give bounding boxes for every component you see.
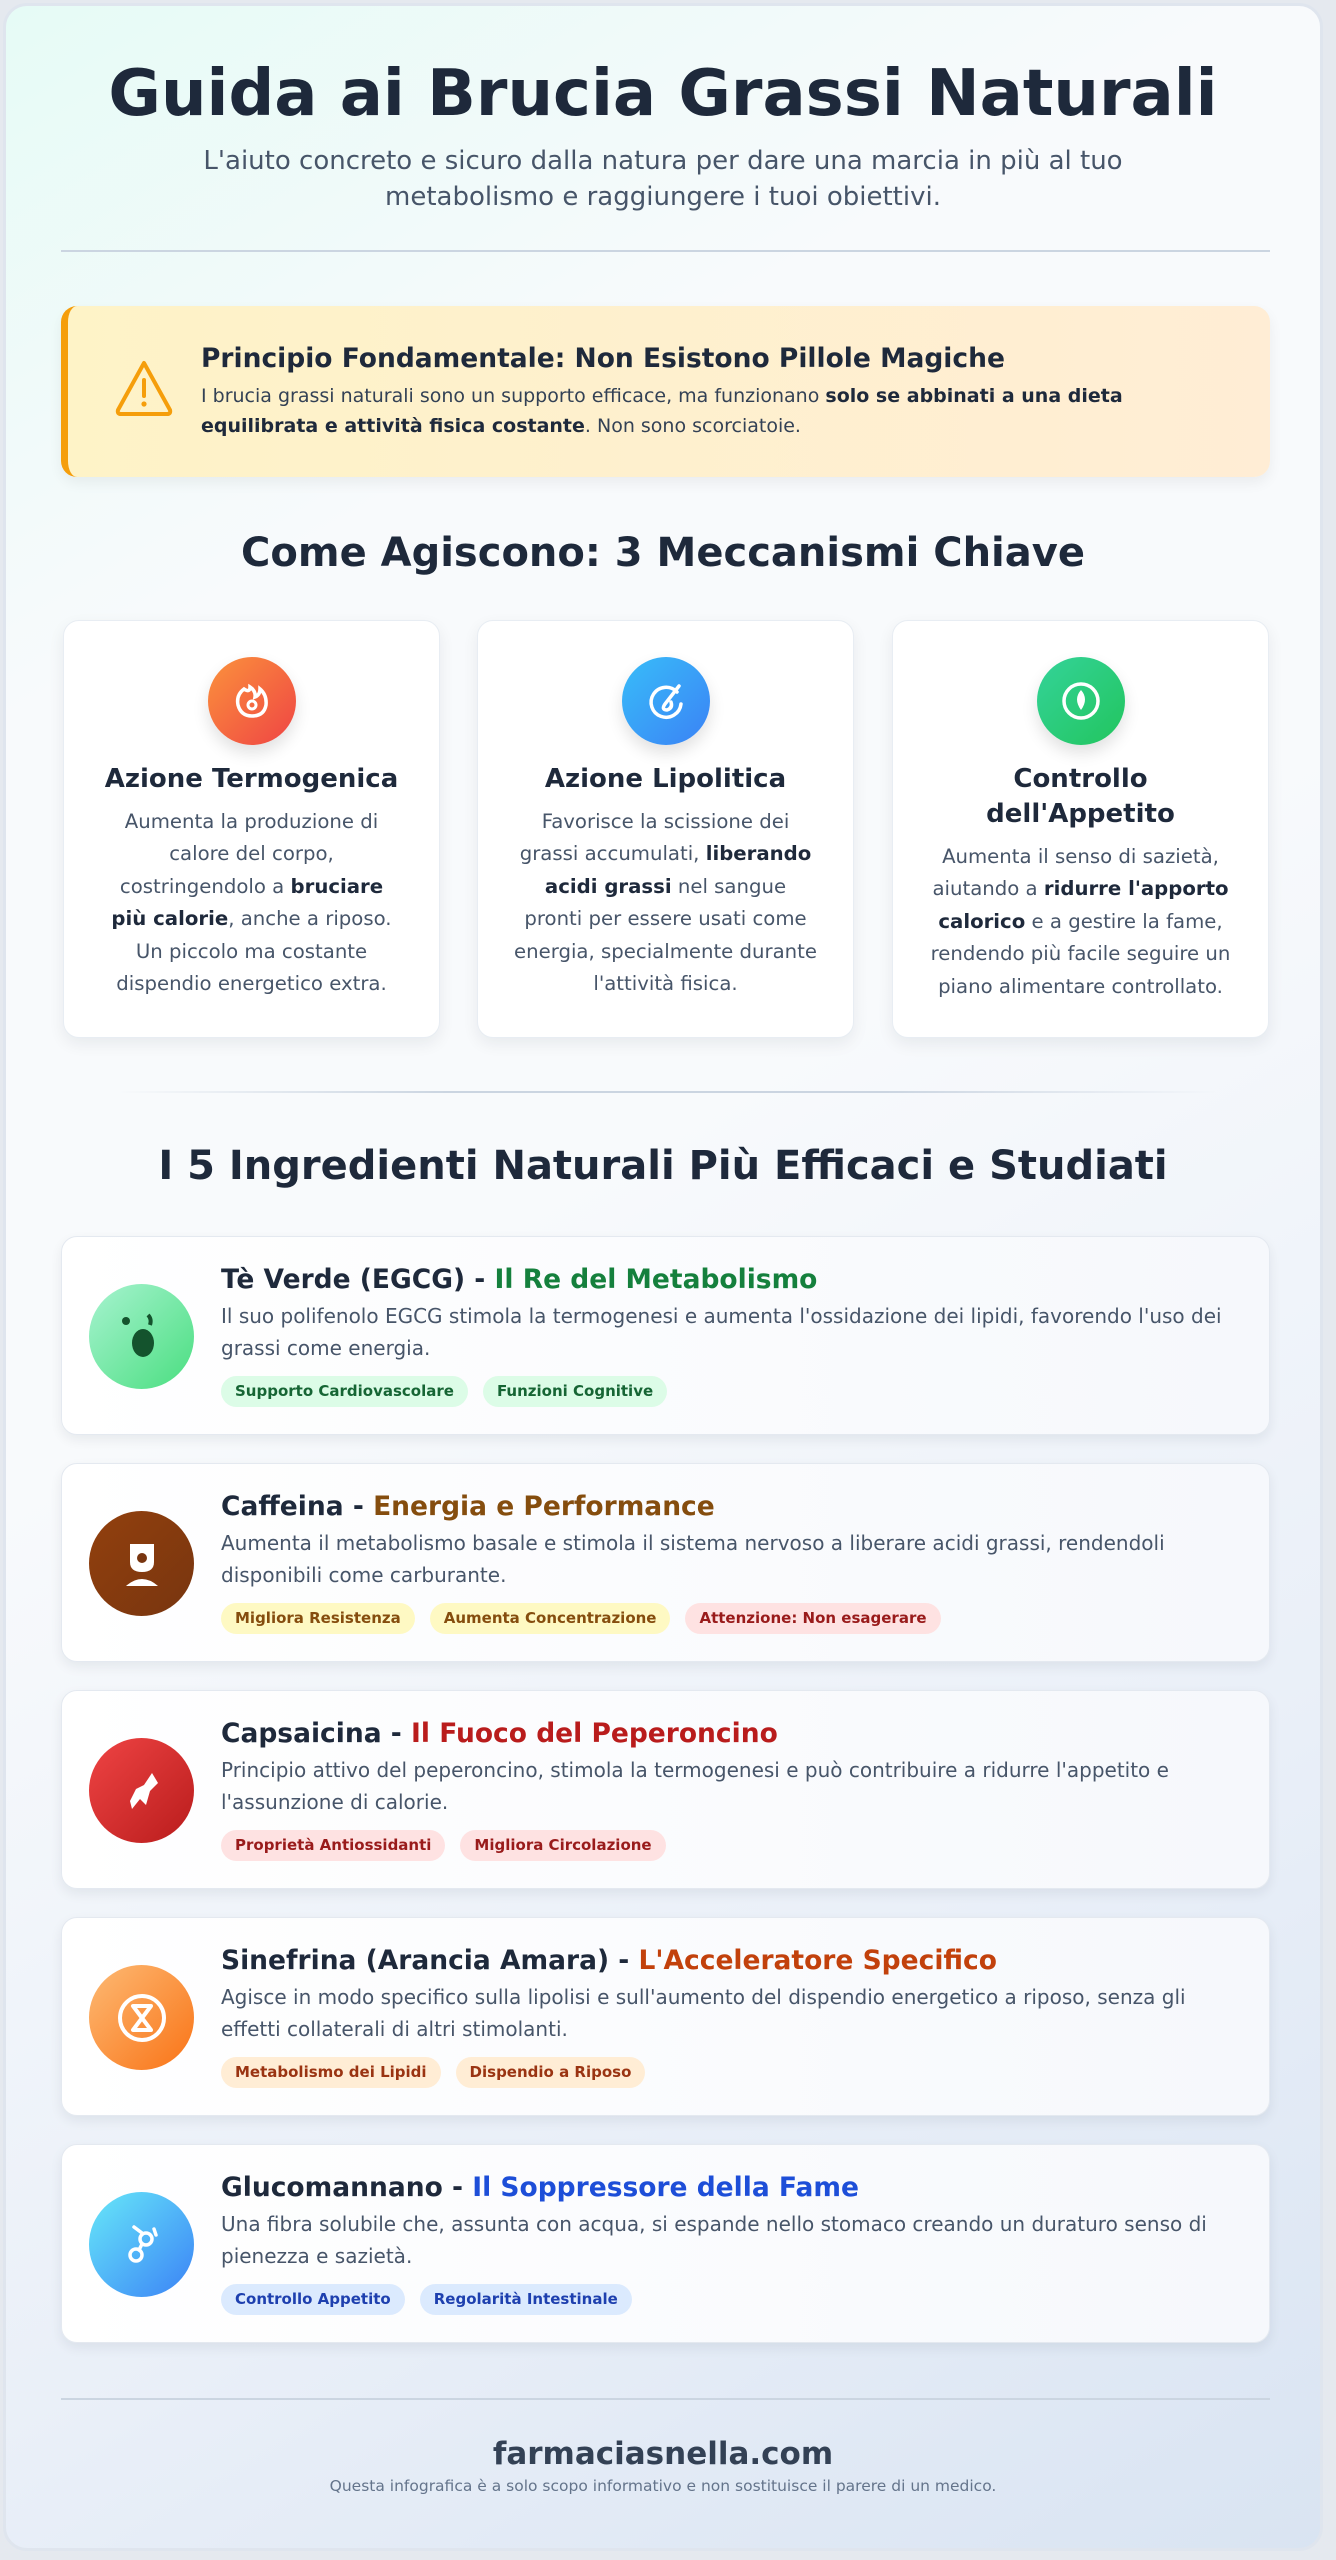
ingredient: synephrine bbox=[61, 1917, 1270, 2116]
tags: Proprietà Antiossidanti bbox=[235, 1836, 431, 1854]
ingredient: green tea: Il suo polifenolo EGCG stimola la termogenesi e aumenta l'ossidazione dei lipidi, favorendo l'uso dei grassi come energia. bbox=[221, 1304, 1222, 1360]
icon: fiber bbox=[89, 2192, 194, 2297]
ingredient: glucomannan: Una fibra solubile che, assunta con acqua, si espande nello stomaco creando un duraturo senso di pienezza e sazietà. bbox=[221, 2212, 1207, 2268]
card: appetite: calorico e a gestire la fame, bbox=[938, 910, 1223, 933]
card: appetite: rendendo più facile seguire un bbox=[931, 942, 1230, 965]
ingredient: green tea bbox=[61, 1236, 1270, 1435]
card: thermogenic bbox=[63, 620, 440, 1038]
tags: Supporto Cardiovascolare bbox=[235, 1382, 454, 1400]
tags bbox=[221, 1603, 941, 1634]
card: thermogenic: Aumenta la produzione di bbox=[125, 810, 378, 833]
ingredient: green tea: Tè Verde (EGCG) - Il Re del Metabolismo bbox=[221, 1264, 817, 1295]
ingredient: caffeine: Caffeina - Energia e Performance bbox=[221, 1491, 715, 1522]
card: thermogenic: costringendolo a bruciare bbox=[120, 875, 383, 898]
icon: tea leaf bbox=[89, 1284, 194, 1389]
card: lipolytic: Azione Lipolitica bbox=[545, 764, 786, 794]
tags: Aumenta Concentrazione bbox=[444, 1609, 656, 1627]
ingredient: caffeine: Aumenta il metabolismo basale e stimola il sistema nervoso a liberare acidi grassi, rendendoli disponibili come carburante. bbox=[221, 1531, 1165, 1587]
icon: coffee bbox=[89, 1511, 194, 1616]
tags: Controllo Appetito bbox=[235, 2290, 391, 2308]
card: lipolytic: grassi accumulati, liberando bbox=[520, 842, 811, 865]
tags: Regolarità Intestinale bbox=[434, 2290, 618, 2308]
card: thermogenic: Un piccolo ma costante bbox=[136, 940, 367, 963]
icon: spiral bbox=[622, 657, 710, 745]
card: thermogenic: Azione Termogenica bbox=[105, 764, 398, 794]
card: appetite: dell'Appetito bbox=[986, 799, 1175, 829]
ingredient: capsaicin: Principio attivo del peperoncino, stimola la termogenesi e può contribuire a ridurre l'appetito e l'assunzione di calorie. bbox=[221, 1758, 1169, 1814]
card: thermogenic: calore del corpo, bbox=[169, 842, 334, 865]
card: appetite: piano alimentare controllato. bbox=[938, 975, 1223, 998]
warning text: I brucia grassi naturali sono un supporto efficace, ma funzionano solo se abbinati a una dieta equilibrata e attività fisica costante. Non sono scorciatoie. bbox=[201, 385, 1123, 437]
tags bbox=[221, 2284, 632, 2315]
tags: Metabolismo dei Lipidi bbox=[235, 2063, 427, 2081]
card: appetite: Aumenta il senso di sazietà, bbox=[942, 845, 1219, 868]
ingredient: capsaicin: Capsaicina - Il Fuoco del Peperoncino bbox=[221, 1718, 778, 1749]
card: appetite bbox=[892, 620, 1269, 1038]
heading: ingredients: I 5 Ingredienti Naturali Più Efficaci e Studiati bbox=[158, 1143, 1168, 1189]
card: lipolytic: acidi grassi nel sangue bbox=[545, 875, 786, 898]
warning callout bbox=[61, 306, 1270, 477]
icon: flame target bbox=[208, 657, 296, 745]
card: appetite: aiutando a ridurre l'apporto bbox=[932, 877, 1228, 900]
icon: warning triangle bbox=[116, 360, 172, 416]
footer disclaimer: Questa infografica è a solo scopo informativo e non sostituisce il parere di un medico. bbox=[330, 2477, 996, 2495]
card: lipolytic bbox=[477, 620, 854, 1038]
ingredient: synephrine: Agisce in modo specifico sulla lipolisi e sull'aumento del dispendio energetico a riposo, senza gli effetti collaterali di altri stimolanti. bbox=[221, 1985, 1186, 2041]
ingredient: capsaicin bbox=[61, 1690, 1270, 1889]
tags: Dispendio a Riposo bbox=[470, 2063, 631, 2081]
ingredient: glucomannan bbox=[61, 2144, 1270, 2343]
warning heading: Principio Fondamentale: Non Esistono Pillole Magiche bbox=[201, 343, 1005, 374]
tags bbox=[221, 2057, 645, 2088]
tags: Funzioni Cognitive bbox=[497, 1382, 653, 1400]
icon: pepper bbox=[89, 1738, 194, 1843]
ingredient: caffeine bbox=[61, 1463, 1270, 1662]
tags: Migliora Circolazione bbox=[474, 1836, 652, 1854]
title: Guida ai Brucia Grassi Naturali bbox=[108, 57, 1218, 131]
tags bbox=[221, 1376, 667, 1407]
tags bbox=[221, 1830, 666, 1861]
card: lipolytic: pronti per essere usati come bbox=[524, 907, 807, 930]
card: lipolytic: l'attività fisica. bbox=[593, 972, 738, 995]
subtitle: L'aiuto concreto e sicuro dalla natura per dare una marcia in più al tuo metabolismo e raggiungere i tuoi obiettivi. bbox=[203, 146, 1123, 212]
icon: hourglass bbox=[89, 1965, 194, 2070]
tags: Attenzione: Non esagerare bbox=[699, 1609, 927, 1627]
card: thermogenic: dispendio energetico extra. bbox=[116, 972, 387, 995]
tags: Migliora Resistenza bbox=[235, 1609, 401, 1627]
heading: mechanisms: Come Agiscono: 3 Meccanismi Chiave bbox=[241, 530, 1085, 576]
ingredient: synephrine: Sinefrina (Arancia Amara) - L'Acceleratore Specifico bbox=[221, 1945, 997, 1976]
card: appetite: Controllo bbox=[1013, 764, 1148, 794]
card: lipolytic: Favorisce la scissione dei bbox=[542, 810, 789, 833]
card: thermogenic: più calorie, anche a riposo. bbox=[111, 907, 392, 930]
icon: leaf ring bbox=[1036, 657, 1124, 745]
card: lipolytic: energia, specialmente durante bbox=[514, 940, 817, 963]
footer brand: farmaciasnella.com bbox=[493, 2436, 833, 2472]
ingredient: glucomannan: Glucomannano - Il Soppressore della Fame bbox=[221, 2172, 859, 2203]
